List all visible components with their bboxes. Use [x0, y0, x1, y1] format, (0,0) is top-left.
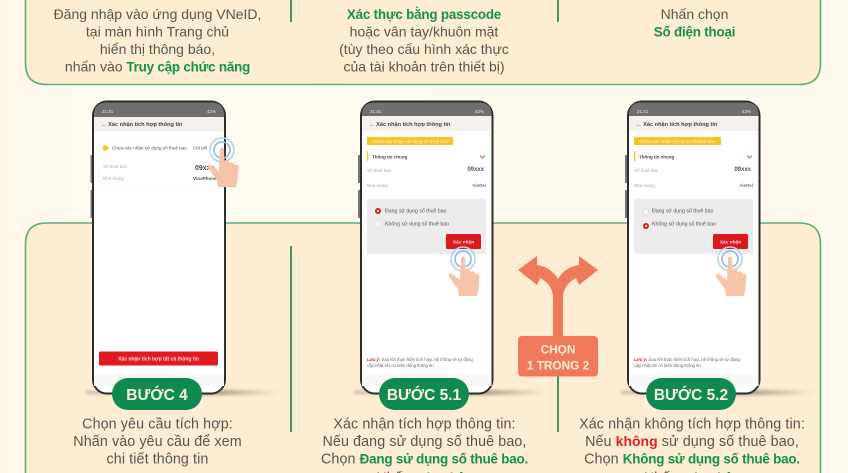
- text: step 4 description: chi tiết thông tin: [107, 452, 208, 468]
- text: step 2 description: Xác thực bằng passcode: [347, 7, 501, 22]
- text: step 2 description: (tùy theo cấu hình xác thực: [339, 41, 509, 57]
- icon: tapping hand: [449, 247, 480, 296]
- phone: step 5.1 screen: 42%: [475, 109, 484, 114]
- phone: step 4 screen: Chưa xác nhận sử dụng số thuê bao: [112, 144, 187, 150]
- badge: step 4: BƯỚC 4: [126, 386, 188, 404]
- phone: step 5.1 screen: Chưa xác nhận sử dụng số thuê bao: [372, 138, 449, 144]
- phone: step 5.2 screen: Thông tin chung: [639, 154, 674, 160]
- text: step 2 description: của tài khoản trên thiết bị): [343, 59, 505, 75]
- phone: step 5.2 screen: Lưu ý: Sau khi thực hiện tích hợp, hệ thống sẽ tự động: [634, 357, 740, 362]
- text: step 5.2 description: Xác nhận không tích hợp thông tin:: [579, 416, 805, 432]
- phone shadows: [86, 390, 813, 395]
- phone: step 5.1 screen: Thông tin chung: [372, 154, 407, 160]
- phone: step 5.2 screen: ← Xác nhận tích hợp thông tin: [636, 122, 718, 128]
- text: step 5.1 description: Chọn Đang sử dụng số thuê bao.: [321, 452, 528, 468]
- phone: step 5.2 screen: 21:41: [637, 109, 649, 114]
- phone: step 5.1 screen: Lưu ý: Sau khi thực hiện tích hợp, hệ thống sẽ tự động: [367, 357, 473, 362]
- badge: step 5.1: [379, 378, 469, 410]
- text: step 5.1 description: Nếu đang sử dụng số thuê bao,: [322, 434, 527, 450]
- phone: step 4 screen: ← Xác nhận tích hợp thông tin: [101, 122, 183, 128]
- phone: step 5.1 screen: 09xxx: [467, 167, 485, 173]
- phone: step 5.1 screen: Viettel: [472, 183, 486, 188]
- phone: step 5.2 screen: Đang sử dụng số thuê bao: [652, 208, 714, 214]
- phone: step 5.1 screen: ← Xác nhận tích hợp thông tin: [369, 122, 451, 128]
- text: step 2 description: hoặc vân tay/khuôn mặt: [350, 24, 498, 40]
- text: step 3 description: Số điện thoại: [654, 25, 735, 40]
- phone: step 5.1 screen: Đang sử dụng số thuê bao: [385, 208, 447, 214]
- arrow: choose one of two: [518, 256, 598, 376]
- badge: step 5.1: BƯỚC 5.1: [387, 386, 462, 404]
- badge: step 4: [112, 378, 202, 410]
- label: choose 1 of 2: 1 TRONG 2: [527, 358, 590, 372]
- phone: step 5.2 screen: Nhà mạng: [634, 183, 655, 188]
- phone: step 5.2 screen: cập nhật khi có biến động thông tin.: [634, 363, 702, 368]
- text: step 4 description: Chọn yêu cầu tích hợp:: [82, 416, 233, 432]
- badge: step 5.2: [646, 378, 736, 410]
- phone: step 4 screen: 21:41: [102, 109, 114, 114]
- icon: tapping hand: [208, 138, 238, 187]
- phone: step 5.1 screen: cập nhật khi có biến động thông tin.: [367, 363, 435, 368]
- phone: step 5.2 screen: Không sử dụng số thuê bao: [652, 220, 716, 228]
- phone: step 5.2 screen: Chưa xác nhận sử dụng số thuê bao: [639, 138, 716, 144]
- text: step 1 description: Đăng nhập vào ứng dụng VNeID,: [54, 6, 261, 22]
- phone: step 5.2 screen: 42%: [742, 109, 751, 114]
- label: choose 1 of 2: CHỌN: [541, 342, 575, 356]
- phone: step 5.1 screen: Số thuê bao: [367, 168, 392, 173]
- badge: step 5.2: BƯỚC 5.2: [654, 386, 728, 404]
- text: step 4 description: Nhấn vào yêu cầu để xem: [73, 434, 242, 450]
- phone: step 4 screen: 09xxx: [195, 165, 215, 172]
- phone: step 5.1 screen: Không sử dụng số thuê bao: [385, 220, 449, 228]
- phone: step 5.1 screen: 21:41: [370, 109, 382, 114]
- phone: step 4 screen: 42%: [207, 109, 216, 114]
- phone: step 5.1 screen: Nhà mạng: [367, 183, 388, 188]
- text: step 5.2 description: Chọn Không sử dụng số thuê bao.: [584, 452, 800, 468]
- phone: step 4 screen: Xác nhận tích hợp tất cả thông tin: [118, 356, 199, 362]
- icon: tapping hand: [716, 247, 746, 296]
- panel: steps 1 to 3: [26, 0, 820, 84]
- phone: step 5.2 screen: Xác nhận: [720, 240, 741, 246]
- phone: step 4 screen: VinaPhone: [193, 176, 217, 181]
- phone: step 5.1 screen: Xác nhận: [453, 240, 474, 246]
- phone: step 5.1 screen: [358, 102, 492, 394]
- text: step 1 description: tại màn hình Trang chủ: [86, 24, 229, 40]
- text: step 1 description: hiển thị thông báo,: [100, 41, 215, 57]
- text: step 3 description: Nhấn chọn: [661, 6, 728, 22]
- phone: step 4 screen: Nhà mạng: [103, 176, 124, 181]
- phone: step 4 screen: Số thuê bao: [103, 164, 128, 169]
- phone: step 5.2 screen: Viettel: [739, 183, 753, 188]
- text: step 5.1 description: Xác nhận tích hợp thông tin:: [333, 416, 516, 432]
- phone: step 5.2 screen: [625, 102, 760, 394]
- phone: step 5.2 screen: Số thuê bao: [634, 168, 659, 173]
- phone: step 4 screen: [90, 102, 238, 394]
- phone: step 4 screen: Chi tiết: [193, 146, 208, 150]
- label: choose 1 of 2: [518, 336, 598, 376]
- panel: steps 4 and 5: [26, 223, 820, 473]
- text: step 1 description: nhấn vào Truy cập chức năng: [65, 59, 250, 75]
- phone: step 5.2 screen: 09xxx: [734, 167, 752, 173]
- text: step 5.2 description: Nếu không sử dụng số thuê bao,: [585, 433, 799, 450]
